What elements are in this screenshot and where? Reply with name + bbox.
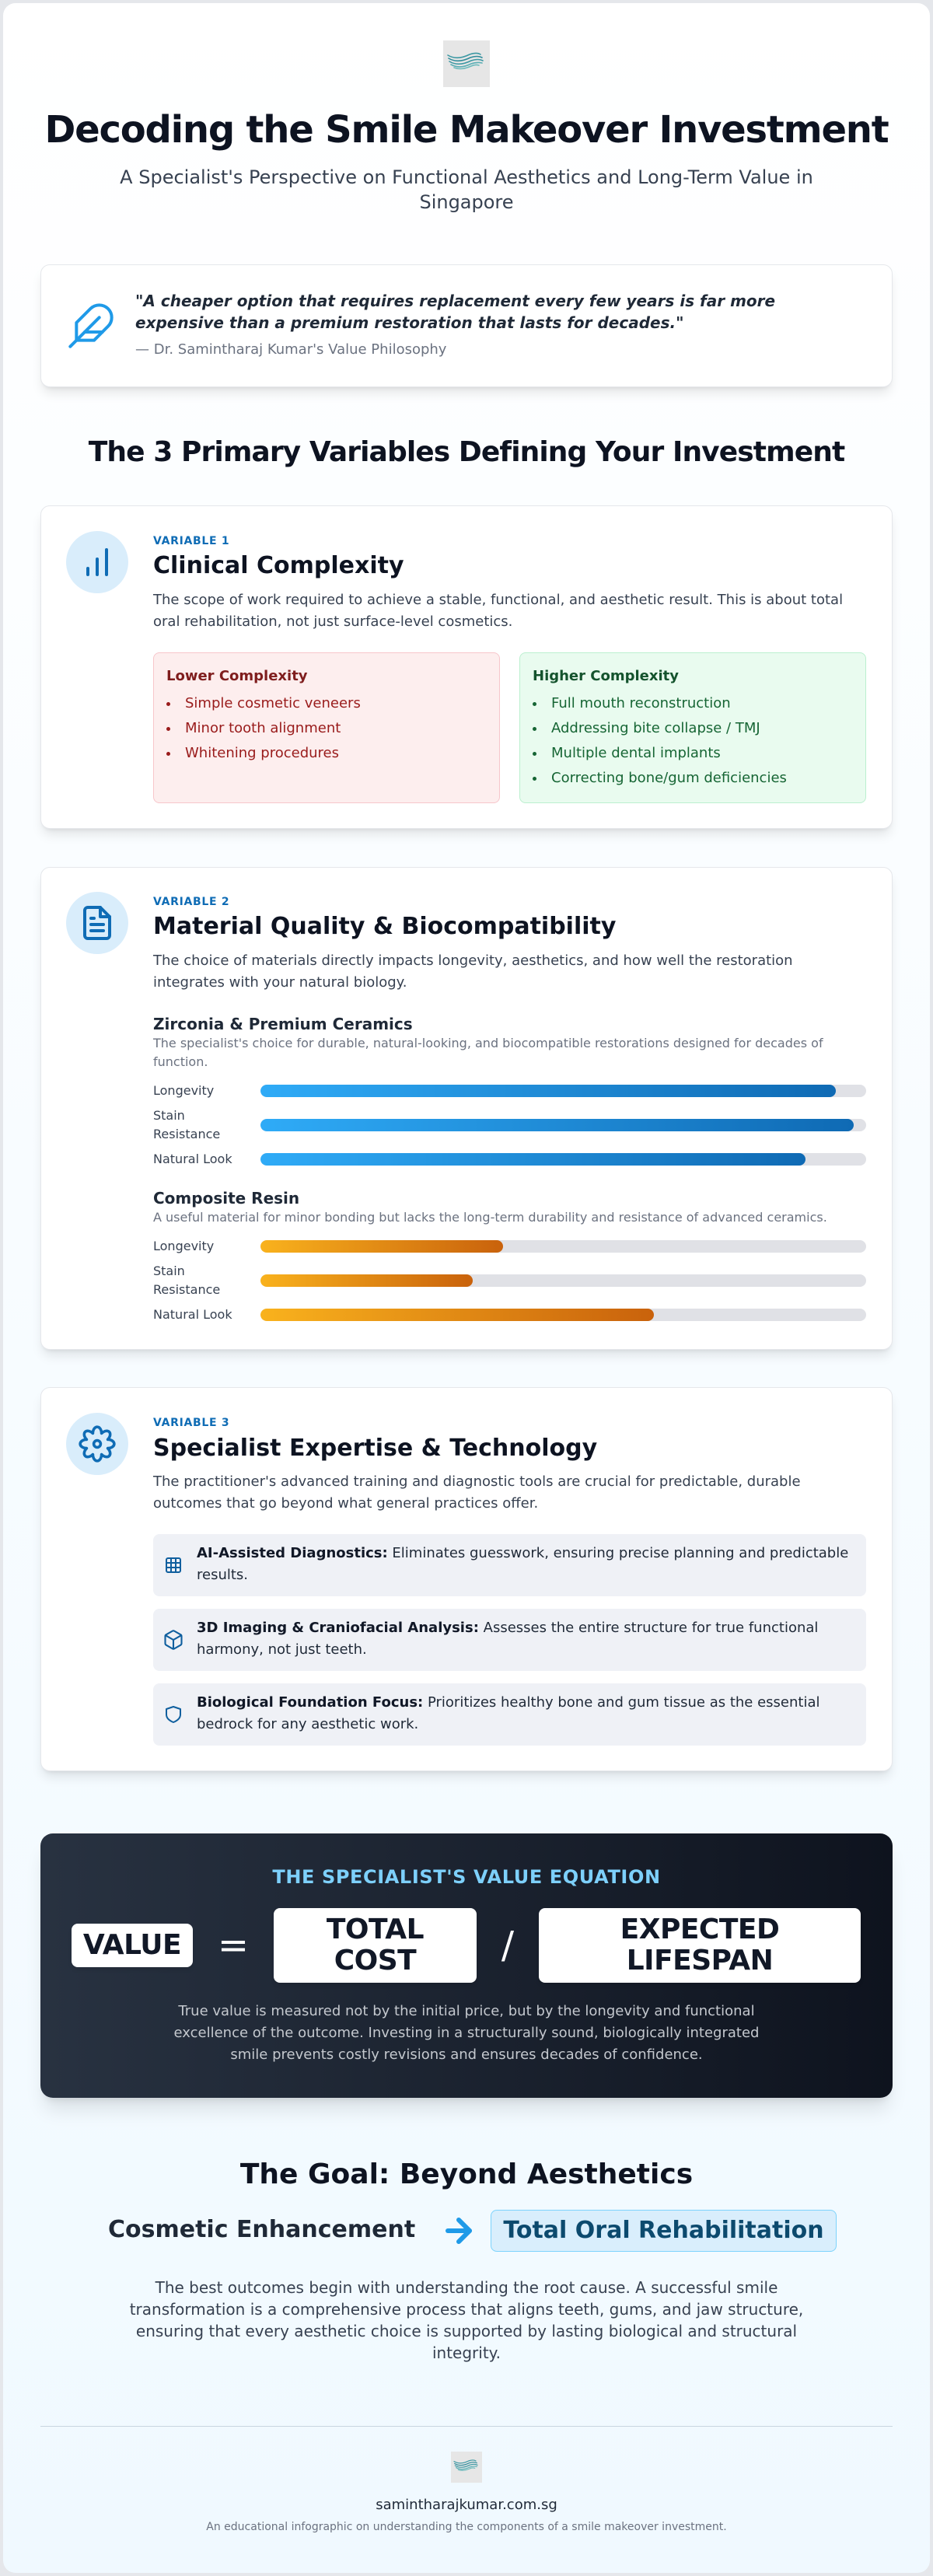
feature: AI-assisted diagnostics: AI-Assisted Diagnostics: Eliminates guesswork, ensuring precise planning and predictable — [197, 1545, 848, 1561]
material description: zirconia: function. — [153, 1054, 208, 1069]
quote attribution: — Dr. Samintharaj Kumar's Value Philosophy — [135, 341, 446, 358]
bar chart: zirconia — [153, 1083, 866, 1166]
higher complexity heading: Higher Complexity — [533, 668, 679, 684]
panel: variable 2 material quality — [40, 867, 893, 1358]
term: expected lifespan — [539, 1908, 861, 1983]
lower complexity box — [153, 652, 500, 803]
footer website: samintharajkumar.com.sg — [376, 2497, 557, 2513]
term: total cost: COST — [334, 1945, 416, 1977]
icon: gear — [66, 1413, 128, 1475]
bar chart: composite: Natural Look — [153, 1307, 232, 1322]
bar chart: zirconia: Natural Look — [153, 1152, 232, 1166]
goal description: The best outcomes begin with understanding the root cause. A successful smile — [156, 2278, 778, 2297]
equation explanation: excellence of the outcome. Investing in a structurally sound, biologically integrated — [174, 2025, 759, 2041]
icon: feather — [68, 303, 114, 348]
subtitle — [120, 166, 813, 213]
feature: AI-assisted diagnostics: results. — [197, 1567, 248, 1583]
goal description — [130, 2278, 803, 2362]
title: Decoding the Smile Makeover Investment — [44, 108, 889, 152]
feature: 3D imaging — [153, 1609, 866, 1671]
equation explanation: True value is measured not by the initial price, but by the longevity and functional — [178, 2003, 755, 2019]
lower complexity heading: Lower Complexity — [166, 668, 308, 684]
description — [152, 1473, 801, 1512]
card background — [40, 1387, 893, 1771]
feature: 3D imaging: 3D Imaging & Craniofacial Analysis: Assesses the entire structure for true functional — [197, 1620, 818, 1636]
higher complexity list: Full mouth reconstruction — [551, 695, 731, 711]
icon: cube — [164, 1630, 183, 1650]
heading: Clinical Complexity — [153, 552, 404, 579]
material description: zirconia — [152, 1036, 823, 1069]
feature: 3D imaging: harmony, not just teeth. — [197, 1641, 367, 1658]
panel: variable 3 specialist expertise — [40, 1387, 893, 1779]
material description: zirconia: The specialist's choice for durable, natural-looking, and biocompatible restorations designed for decades of — [153, 1036, 823, 1050]
material description: composite: A useful material for minor bonding but lacks the long-term durability and resistance of advanced ceramics. — [153, 1210, 827, 1225]
goal description: integrity. — [432, 2344, 501, 2362]
equation explanation: smile prevents costly revisions and ensures decades of confidence. — [230, 2046, 703, 2063]
equation explanation — [174, 2003, 759, 2063]
material heading: zirconia: Zirconia & Premium Ceramics — [153, 1015, 413, 1033]
card background — [40, 867, 893, 1350]
description: integrates with your natural biology. — [153, 974, 407, 991]
goal description: ensuring that every aesthetic choice is supported by lasting biological and structural — [136, 2322, 797, 2340]
quote card — [40, 264, 893, 387]
operator: divide: / — [501, 1924, 514, 1967]
operator: equals: = — [218, 1924, 249, 1967]
lower complexity list: Minor tooth alignment — [185, 720, 341, 736]
description — [152, 592, 843, 630]
feature: AI-assisted diagnostics — [153, 1534, 866, 1596]
section heading: The 3 Primary Variables Defining Your Investment — [89, 436, 844, 468]
card background — [40, 505, 893, 829]
feature: biological foundation — [153, 1683, 866, 1746]
higher complexity list: Multiple dental implants — [551, 745, 721, 761]
bar chart: composite — [153, 1239, 866, 1322]
icon: document — [66, 892, 128, 954]
total oral rehabilitation callout: Total Oral Rehabilitation — [503, 2217, 824, 2244]
higher complexity list: Correcting bone/gum deficiencies — [551, 770, 787, 786]
higher complexity box — [519, 652, 866, 803]
panel: philosophy quote — [40, 264, 893, 395]
bar chart: zirconia: Longevity — [153, 1083, 214, 1098]
subtitle: Singapore — [419, 191, 514, 213]
arrow — [446, 2218, 472, 2244]
bar chart: zirconia: Resistance — [153, 1127, 220, 1141]
term: value — [72, 1924, 193, 1967]
higher complexity list — [533, 695, 787, 786]
quote text: expensive than a premium restoration that lasts for decades." — [135, 313, 684, 332]
subtitle: A Specialist's Perspective on Functional Aesthetics and Long-Term Value in — [120, 166, 813, 188]
logo — [443, 40, 490, 87]
bar chart: zirconia: Stain — [153, 1108, 185, 1123]
quote text — [135, 292, 775, 332]
description: oral rehabilitation, not just surface-level cosmetics. — [153, 613, 512, 630]
icon: grid — [166, 1557, 181, 1573]
lower complexity list: Simple cosmetic veneers — [185, 695, 361, 711]
term: expected lifespan: LIFESPAN — [627, 1945, 773, 1977]
lower complexity list — [166, 695, 361, 761]
panel: variable 1 clinical complexity — [40, 505, 893, 837]
total oral rehabilitation callout — [491, 2210, 837, 2252]
label: VARIABLE 3 — [153, 1417, 229, 1429]
higher complexity list: Addressing bite collapse / TMJ — [551, 720, 760, 736]
bar chart: composite: Stain — [153, 1264, 185, 1278]
term: total cost: TOTAL — [327, 1914, 424, 1945]
term: value: VALUE — [83, 1929, 181, 1961]
lower complexity list: Whitening procedures — [185, 745, 339, 761]
feature: biological foundation: Biological Foundation Focus: Prioritizes healthy bone and gum tissue as the essential — [197, 1694, 819, 1711]
goal description: transformation is a comprehensive process that aligns teeth, gums, and jaw structure, — [130, 2300, 803, 2319]
equation heading: THE SPECIALIST'S VALUE EQUATION — [272, 1866, 661, 1888]
cosmetic enhancement label: Cosmetic Enhancement — [108, 2216, 415, 2243]
quote text: "A cheaper option that requires replacement every few years is far more — [135, 292, 775, 310]
description: The choice of materials directly impacts longevity, aesthetics, and how well the restoration — [153, 952, 793, 969]
description: The scope of work required to achieve a stable, functional, and aesthetic result. This is about total — [153, 592, 843, 608]
term: expected lifespan: EXPECTED — [620, 1914, 779, 1945]
material heading: composite: Composite Resin — [153, 1189, 299, 1208]
label: VARIABLE 2 — [153, 896, 229, 908]
goal heading: The Goal: Beyond Aesthetics — [240, 2158, 693, 2190]
icon: bar chart — [66, 531, 128, 593]
term: total cost — [274, 1908, 477, 1983]
panel: value equation — [40, 1833, 893, 2098]
heading: Material Quality & Biocompatibility — [153, 913, 616, 940]
bar chart: composite: Resistance — [153, 1282, 220, 1297]
bar chart: composite: Longevity — [153, 1239, 214, 1253]
heading: Specialist Expertise & Technology — [153, 1435, 597, 1462]
feature: biological foundation: bedrock for any aesthetic work. — [197, 1716, 418, 1732]
label: VARIABLE 1 — [153, 535, 229, 547]
description — [152, 952, 793, 991]
description: The practitioner's advanced training and diagnostic tools are crucial for predictable, durable — [153, 1473, 801, 1490]
footer logo — [451, 2452, 482, 2483]
icon: shield — [166, 1706, 181, 1723]
description: outcomes that go beyond what general practices offer. — [153, 1495, 538, 1512]
footer caption: An educational infographic on understanding the components of a smile makeover investment. — [206, 2521, 727, 2533]
